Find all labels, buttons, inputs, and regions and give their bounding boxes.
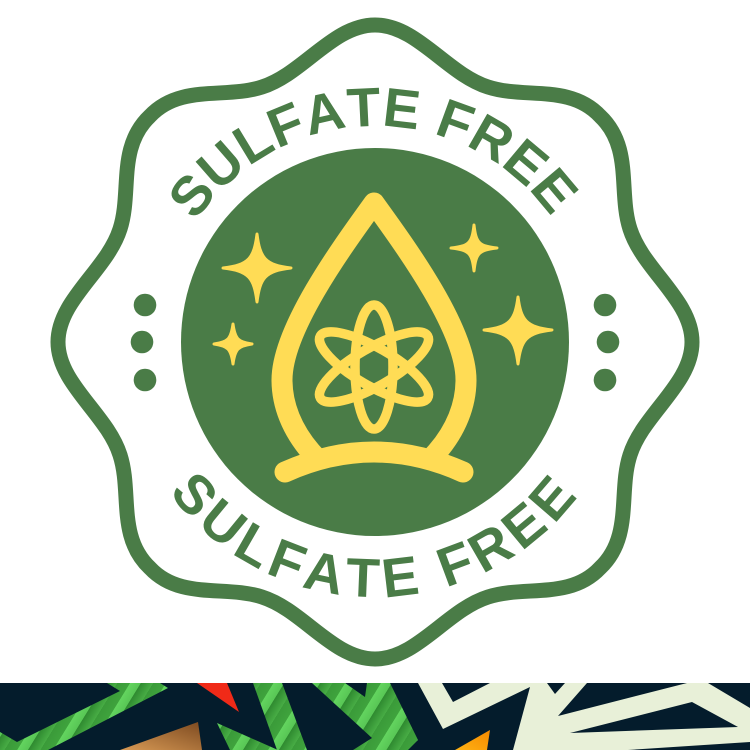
icon: drop base arc <box>285 452 463 472</box>
icon: water drop <box>282 203 466 462</box>
heading: top curved text: SULFATE FREE <box>172 88 579 216</box>
left dots <box>131 294 156 391</box>
badge outline <box>58 25 692 659</box>
icon: sparkle upper right <box>451 225 497 271</box>
icon: atom <box>311 305 437 429</box>
icon: sparkle right <box>484 297 552 364</box>
bottom decorative strip <box>0 683 750 750</box>
icon: sparkle upper left <box>223 234 291 302</box>
inner green circle <box>181 148 569 536</box>
icon: sparkle lower left <box>214 324 252 364</box>
right dots <box>594 294 619 391</box>
heading: bottom curved text: SULFATE FREE <box>174 474 577 598</box>
